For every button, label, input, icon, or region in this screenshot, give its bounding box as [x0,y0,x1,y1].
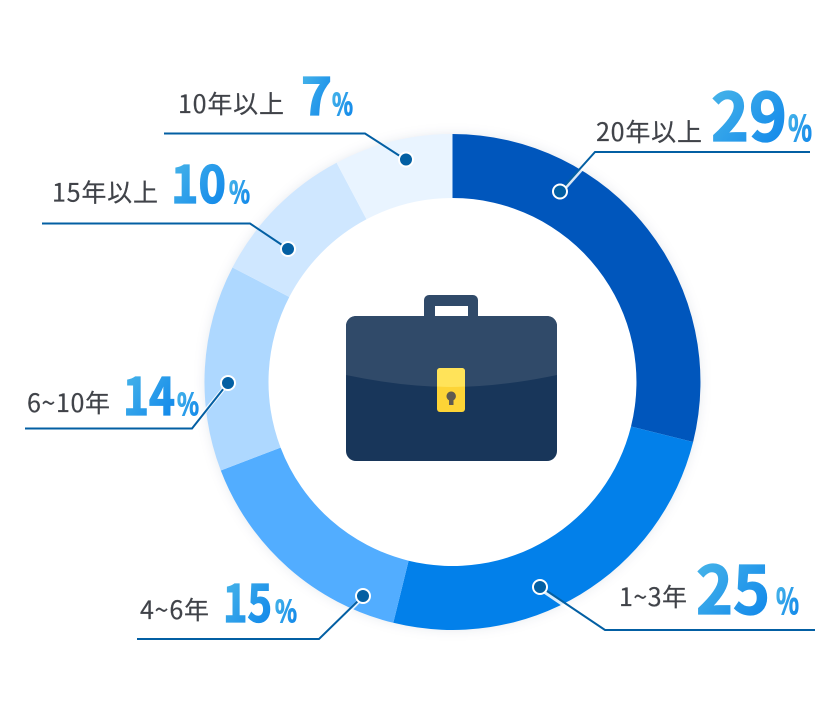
icon: lock [437,368,465,412]
label: 15年以上 [52,174,158,210]
marker dot [533,580,547,594]
leader line [164,134,406,160]
briefcase upper flap [346,316,557,387]
value: 7 [301,56,332,130]
segment: 4~6年 15% [221,448,409,623]
briefcase handle [424,295,478,318]
percent sign: % [229,168,250,212]
percent sign: % [788,101,812,152]
value: 29 [711,65,787,161]
icon: briefcase [346,295,557,461]
percent sign: % [776,574,799,625]
marker dot [399,152,413,166]
briefcase body [346,316,557,461]
callout: 6~10年 14% [25,356,235,430]
percent sign: % [177,380,199,424]
segment: 6~10年 14% [204,268,289,470]
value: 25 [696,538,770,634]
callout: 10年以上 7% [164,56,413,166]
segment: 20年以上 29% [452,134,700,442]
value: 15 [223,563,272,637]
percent sign: % [275,587,297,631]
callout: 15年以上 10% [42,144,295,256]
segment: 1~3年 25% [393,426,693,630]
marker dot [356,589,370,603]
segment: 10年以上 7% [337,134,452,219]
callout: 1~3年 25% [533,538,815,634]
value: 10 [171,144,226,218]
marker dot [221,376,235,390]
leader line [562,155,594,191]
leader line [25,383,228,428]
donut chart [204,134,700,630]
leader line [137,596,363,639]
leader line [42,224,288,249]
percent sign: % [332,80,353,124]
value: 14 [123,356,175,430]
label: 1~3年 [619,578,687,614]
label: 4~6年 [140,591,209,627]
label: 6~10年 [27,384,110,420]
leader line [541,587,815,630]
label: 20年以上 [596,113,702,149]
marker dot [553,184,567,198]
callout: 20年以上 29% [553,65,812,198]
label: 10年以上 [178,85,284,121]
callout: 4~6年 15% [137,563,370,640]
marker dot [281,242,295,256]
segment: 15年以上 10% [232,163,366,297]
